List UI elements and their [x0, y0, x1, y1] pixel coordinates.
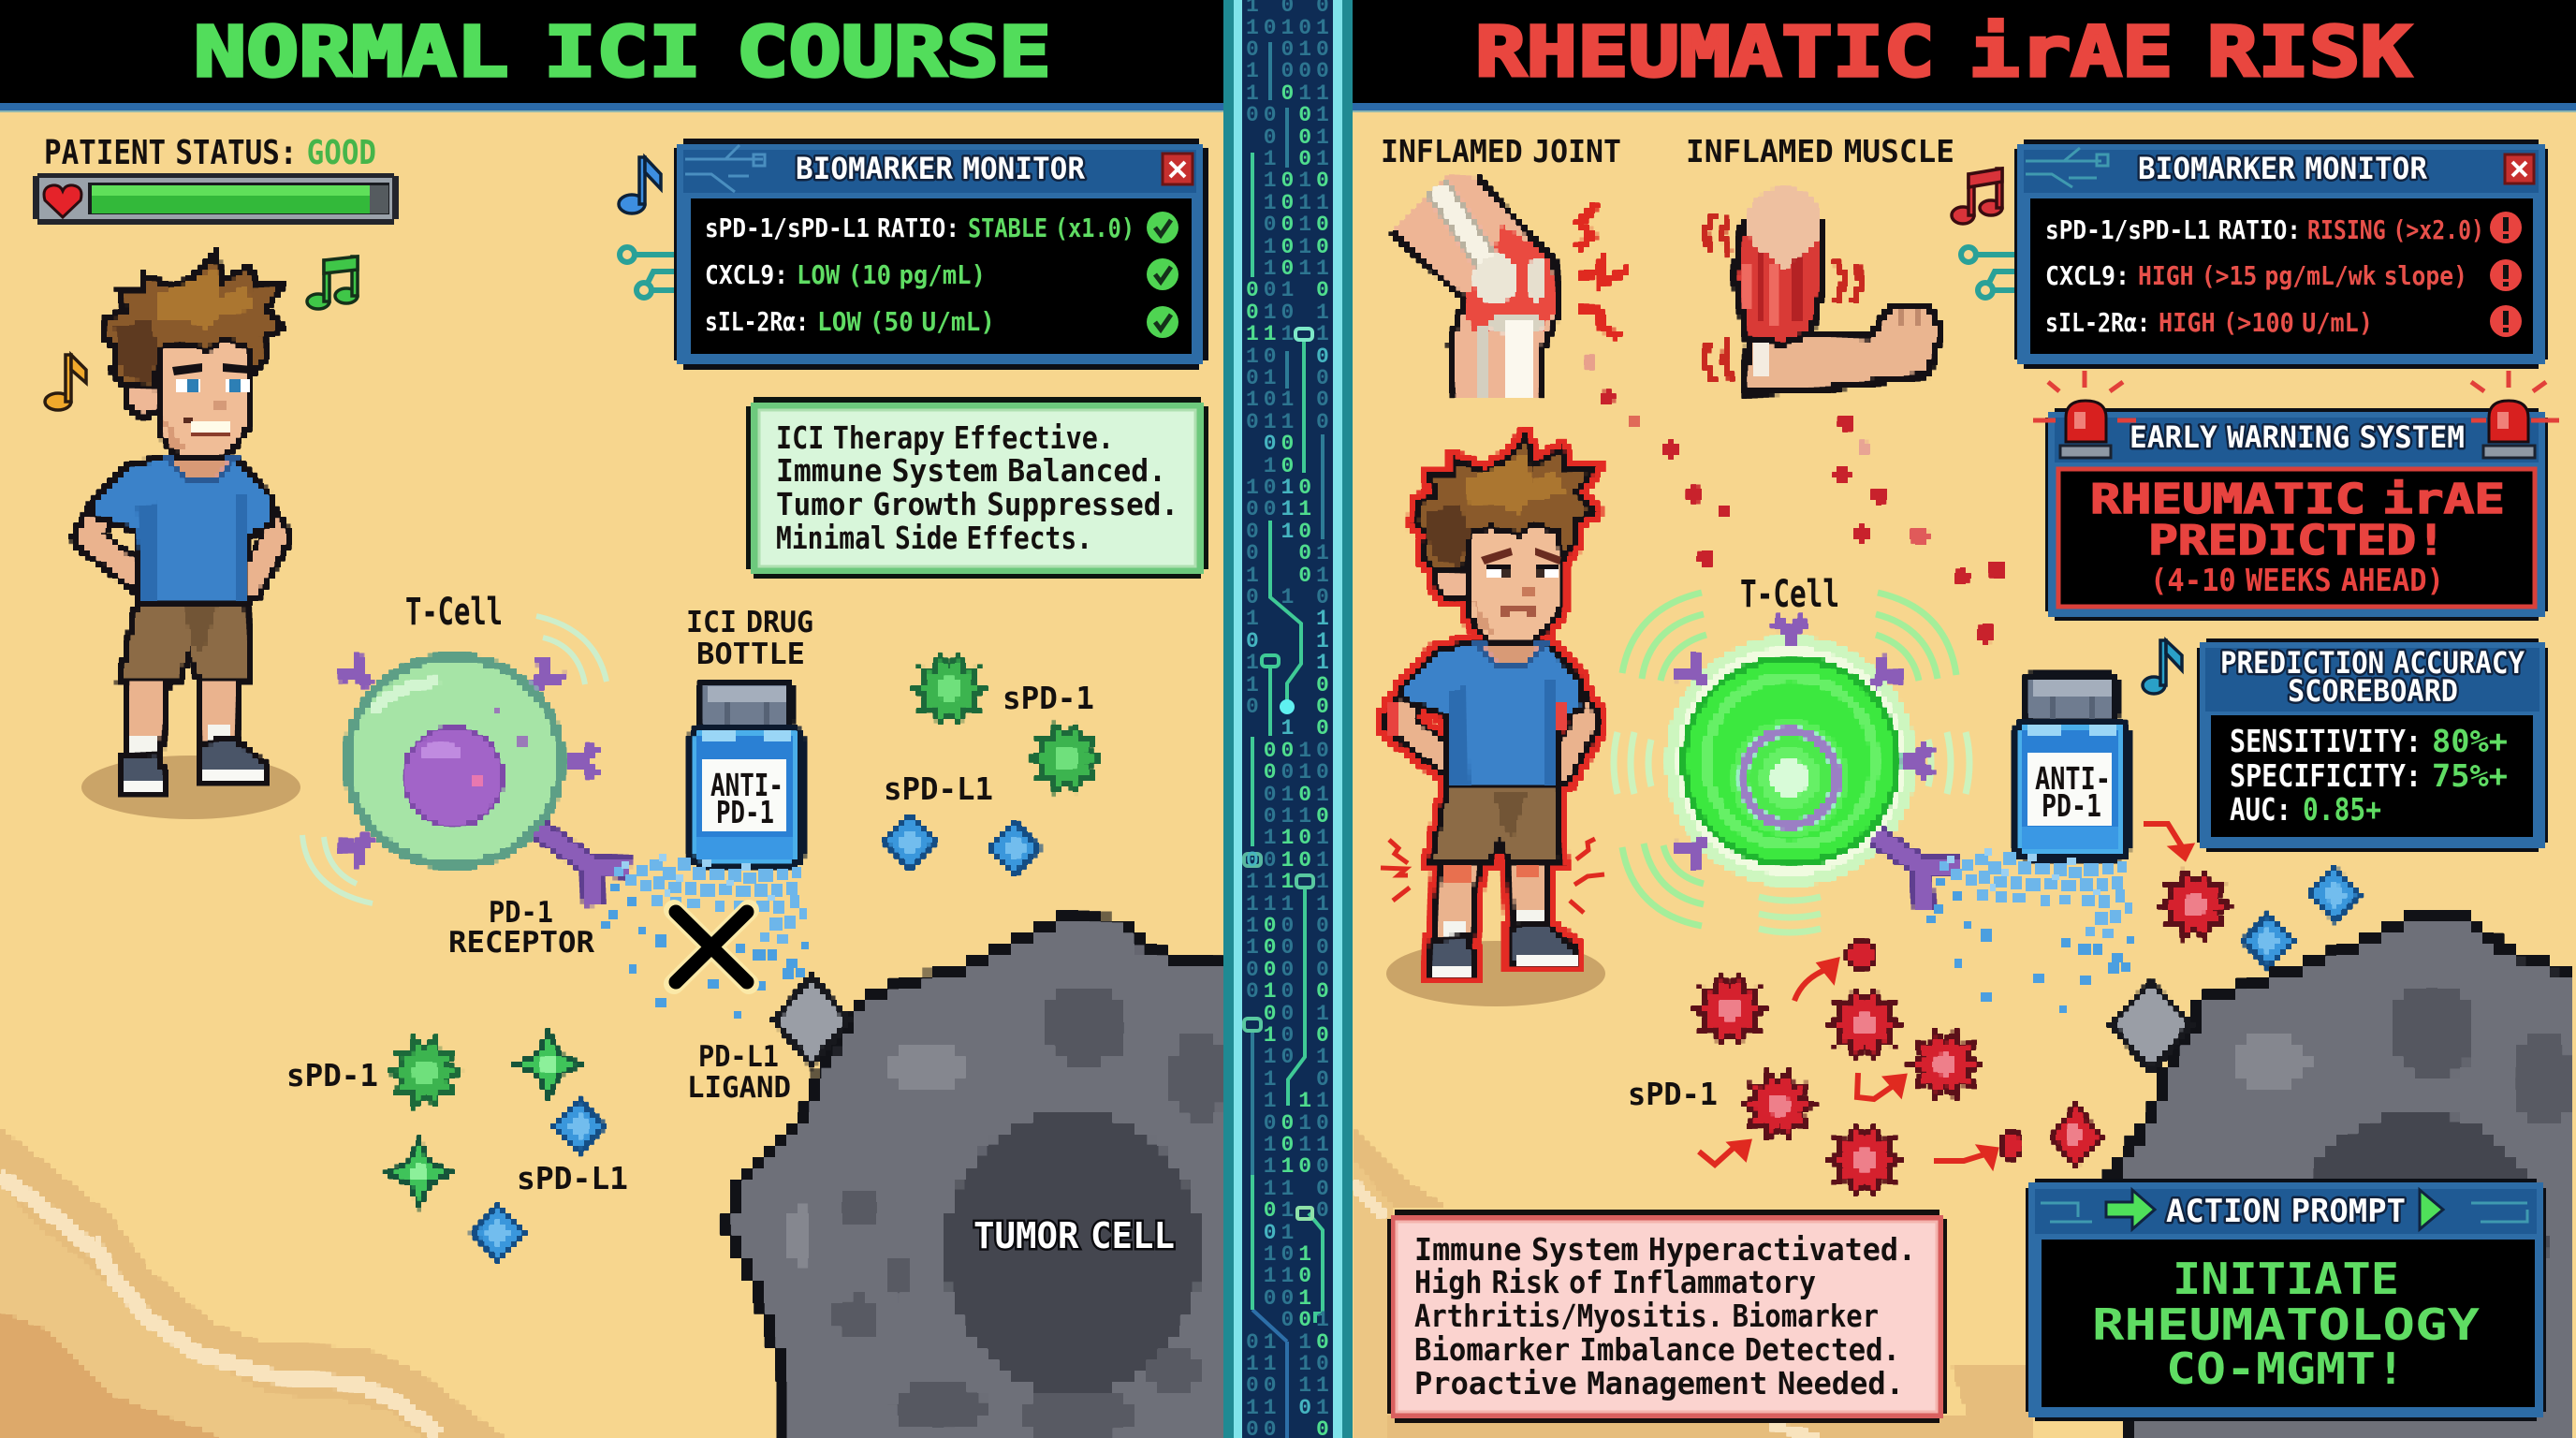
row: CXCL9: HIGH (>15 pg/mL/wk slope) — [2138, 260, 2467, 291]
close button — [2505, 154, 2534, 183]
row: ratio: sPD-1/sPD-L1 RATIO: — [705, 213, 959, 243]
bottle label text — [710, 767, 783, 830]
T-cell right — [1614, 573, 1969, 932]
binary digits: 0110 — [1246, 804, 1334, 829]
receptor label: RECEPTOR — [448, 926, 594, 960]
T-cell label: T-Cell — [405, 591, 503, 634]
warning text — [2090, 476, 2505, 598]
row: sIL-2Ra: sIL-2Rα: — [2045, 307, 2150, 338]
character body — [86, 253, 283, 792]
PD-L1 ligand left — [775, 976, 848, 1064]
header: left — [0, 0, 1226, 112]
binary digits: 10 1 — [1246, 1045, 1334, 1069]
binary digits: 1101 — [1246, 826, 1334, 850]
binary digits — [1246, 0, 1334, 1438]
T-cell left — [302, 591, 607, 903]
warning text: RHEUMATIC irAE — [2090, 476, 2505, 523]
icon: teal music note — [2143, 640, 2182, 694]
marker labels left: sPD-1 — [1003, 680, 1094, 716]
binary digits: 1 011 — [1246, 81, 1334, 106]
monitor title: BIOMARKER MONITOR — [796, 151, 1086, 186]
glowing node — [1280, 699, 1295, 714]
arrow: green triangle — [2420, 1190, 2443, 1229]
binary digits: 1011 — [1246, 257, 1334, 281]
binary digits: 0101 — [1246, 783, 1334, 807]
decorative sand waves right — [1353, 1128, 2031, 1438]
bottle label text — [2035, 760, 2111, 824]
T-cell glowing body — [1665, 614, 1935, 887]
circuit trace left — [620, 247, 674, 298]
pain marks — [1381, 839, 1604, 913]
callout: green status box: ICI Therapy Effective. — [776, 419, 1114, 456]
drug spray particles left — [601, 854, 809, 1019]
callout: green status box — [746, 397, 1208, 579]
scoreboard values: 75%+ — [2432, 757, 2508, 794]
binary digits: 0 1 0 — [1246, 585, 1334, 609]
scoreboard values: 80%+ — [2432, 723, 2508, 759]
icon: heart — [44, 185, 81, 217]
binary digits: 00 11 — [1246, 1373, 1334, 1398]
binary digits: 00 1 — [1246, 1002, 1334, 1026]
row: CXCL9: LOW (10 pg/mL) — [797, 259, 986, 290]
arrows: red motion — [1699, 824, 2190, 1165]
circuit lines — [1244, 42, 1323, 1438]
binary digits: 0 010 — [1246, 37, 1334, 62]
binary digits: 0010 — [1246, 213, 1334, 237]
binary digits: 00101 — [1246, 848, 1334, 873]
warning text: (4-10 WEEKS AHEAD) — [2150, 562, 2444, 598]
monitor: biomarker right — [2014, 139, 2548, 369]
binary digits: 1 11 — [1246, 1089, 1334, 1113]
callout: pink risk box: High Risk of Inflammatory — [1414, 1264, 1816, 1300]
T-cell body — [332, 648, 600, 873]
binary digits: 0010 — [1246, 739, 1334, 763]
arrow: green right — [2106, 1190, 2155, 1229]
scoreboard title: PREDICTION ACCURACY — [2220, 645, 2525, 681]
icon: orange music note — [45, 355, 86, 410]
circuit trace right — [1961, 247, 2014, 298]
binary digits: 0 01 — [1246, 125, 1334, 150]
binary digits: 011 0 — [1246, 410, 1334, 434]
binary digits: 010 1 — [1246, 301, 1334, 325]
row: ratio: RISING (>x2.0) — [2307, 214, 2484, 245]
PD-1 receptor arm left — [539, 829, 631, 906]
panel: early warning system — [2033, 371, 2559, 621]
binary digits: 0010 — [1246, 1111, 1334, 1136]
close button — [1163, 154, 1193, 184]
scoreboard values: SENSITIVITY: — [2230, 723, 2422, 759]
tumor cell left — [728, 919, 1245, 1438]
character: healthy patient — [81, 253, 300, 819]
scoreboard values — [2230, 723, 2508, 828]
bottle label text: ANTI- — [2035, 760, 2111, 797]
ligand label: LIGAND — [687, 1071, 791, 1105]
activation waves — [1614, 593, 1969, 932]
PD-L1 ligand right — [2112, 983, 2190, 1071]
tumor cell right — [2112, 917, 2576, 1438]
action text: INITIATE — [2173, 1254, 2399, 1304]
drug spray particles right — [1926, 848, 2134, 1013]
divider: binary column — [1223, 0, 1353, 1438]
character shadow — [81, 756, 300, 819]
marker labels left: sPD-L1 — [517, 1160, 628, 1196]
binary digits: 0 0 — [1246, 695, 1334, 719]
character shadow — [1386, 941, 1605, 1006]
icon: alarm left — [2033, 371, 2136, 458]
ligand label — [687, 1040, 791, 1105]
bottle label text: ANTI- — [710, 767, 783, 803]
ligand label: PD-L1 — [698, 1040, 779, 1074]
header: right: RHEUMATIC irAE RISK — [1475, 12, 2412, 93]
binary digits: 00 01 — [1246, 103, 1334, 127]
binary digits: 1 0 — [1246, 1067, 1334, 1092]
binary digits: 1010 — [1246, 235, 1334, 259]
character: patient at risk — [1381, 437, 1605, 1006]
icons: alerts — [2490, 212, 2522, 337]
binary digits: 1 0 — [1246, 716, 1334, 741]
binary digits: 0011 — [1246, 497, 1334, 521]
panel title: EARLY WARNING SYSTEM — [2130, 419, 2465, 455]
binary digits: 01 0 — [1246, 366, 1334, 390]
drug label left: BOTTLE — [696, 638, 805, 671]
scoreboard values: AUC: — [2230, 791, 2291, 828]
drug label left: ICI DRUG — [686, 606, 813, 639]
label: inflamed muscle: INFLAMED MUSCLE — [1686, 133, 1954, 169]
receptor label: PD-1 — [489, 896, 553, 930]
callout: green status box: Tumor Growth Suppressed. — [776, 486, 1178, 522]
icon: alarm right — [2471, 371, 2559, 458]
monitor: biomarker left — [674, 139, 1208, 370]
binary digits: 000 0 — [1246, 958, 1334, 982]
binary digits: 001 0 — [1246, 278, 1334, 302]
health bar — [33, 173, 399, 225]
binary digits: 010 0 — [1246, 979, 1334, 1004]
binary digits: 1 1 — [1246, 607, 1334, 631]
binary digits: 01 — [1246, 1221, 1334, 1245]
action text: RHEUMATOLOGY — [2092, 1299, 2480, 1350]
binary digits: 10 0 — [1246, 345, 1334, 369]
label: inflamed joint: INFLAMED JOINT — [1381, 133, 1621, 169]
binary digits: 1100 — [1246, 1154, 1334, 1179]
row: sIL-2Ra — [2045, 307, 2373, 338]
decorative sand waves left — [0, 1128, 505, 1438]
binary digits: 0010 — [1246, 760, 1334, 785]
tumor label left: TUMOR CELL — [973, 1215, 1175, 1256]
marker labels left: sPD-L1 — [884, 770, 993, 807]
warning text: PREDICTED! — [2148, 517, 2446, 565]
binary digits: 1011 — [1246, 1133, 1334, 1157]
binary digits: 101 — [1246, 1242, 1334, 1267]
cytokine dots — [1584, 356, 2007, 643]
panel: action prompt — [2026, 1179, 2546, 1421]
binary digits: 0 10 — [1246, 520, 1334, 544]
binary digits: 1 01 — [1246, 147, 1334, 171]
icon: inflamed muscle arm — [1704, 187, 1941, 393]
header: right — [1348, 0, 2576, 112]
binary digits: 11 10 — [1246, 1352, 1334, 1376]
icon: red music note — [1952, 169, 2002, 224]
binary digits: 0 1 — [1246, 629, 1334, 653]
binary digits: 101 0 — [1246, 388, 1334, 412]
callout: pink risk box: Arthritis/Myositis. Biomarker — [1414, 1298, 1879, 1334]
binary digits: 100 0 — [1246, 935, 1334, 960]
row: ratio: sPD-1/sPD-L1 RATIO: — [2045, 214, 2301, 245]
binary digits: 111 1 — [1246, 870, 1334, 894]
soluble markers left — [388, 656, 1101, 1259]
header: left: NORMAL ICI COURSE — [194, 12, 1051, 93]
row: CXCL9: CXCL9: — [705, 259, 788, 290]
character face: unwell — [1481, 548, 1561, 617]
drug bottle left — [691, 682, 802, 865]
binary digits: 1010 — [1246, 169, 1334, 193]
scoreboard values: 0.85+ — [2303, 791, 2381, 828]
marker labels left: sPD-1 — [286, 1057, 378, 1093]
action text: CO-MGMT! — [2166, 1343, 2406, 1394]
row: sIL-2Ra: sIL-2Rα: — [705, 306, 809, 337]
binary digits: 01 0 — [1246, 1198, 1334, 1223]
row: ratio: STABLE (x1.0) — [968, 213, 1134, 243]
binary digits: 11 01 — [1246, 1396, 1334, 1420]
label: sPD-1 right: sPD-1 — [1628, 1076, 1718, 1112]
drug bottle right — [2016, 675, 2128, 858]
scoreboard title — [2220, 645, 2525, 709]
binary digits: 10 0 — [1246, 1023, 1334, 1048]
callout: green status box: Immune System Balanced. — [776, 452, 1166, 489]
binary digits: 001 — [1246, 1308, 1334, 1332]
binary digits: 110 — [1246, 1264, 1334, 1288]
binary digits: 01 10 — [1246, 1330, 1334, 1355]
binary digits: 111 1 — [1246, 322, 1334, 346]
binary digits: 001 — [1246, 1286, 1334, 1311]
binary digits: 100 0 — [1246, 914, 1334, 938]
scoreboard title: SCOREBOARD — [2288, 673, 2458, 709]
character face: smiling — [172, 363, 251, 436]
binary digits: 11 0 — [1246, 1177, 1334, 1201]
row: ratio — [705, 213, 1134, 243]
panel title: ACTION PROMPT — [2166, 1193, 2406, 1230]
callout: pink risk box: Biomarker Imbalance Detected. — [1414, 1331, 1900, 1368]
icon: blocking X — [674, 910, 749, 984]
row: CXCL9 — [705, 259, 986, 290]
binary digits: 10 — [1246, 454, 1334, 478]
binary digits: 00 — [1246, 432, 1334, 456]
row: sIL-2Ra: HIGH (>100 U/mL) — [2159, 307, 2373, 338]
icon: green music note — [307, 257, 358, 309]
scoreboard values: SPECIFICITY: — [2230, 757, 2422, 794]
bottle label text: PD-1 — [716, 794, 774, 830]
marker labels left — [286, 680, 1094, 1196]
binary digits: 111 1 — [1246, 892, 1334, 917]
binary digits: 0 01 — [1246, 541, 1334, 565]
action text — [2092, 1254, 2480, 1394]
binary digits: 1 01 — [1246, 564, 1334, 588]
binary digits: 10101 — [1246, 16, 1334, 40]
callout: pink risk box — [1387, 1210, 1947, 1423]
T-cell motion arcs — [302, 616, 607, 903]
binary digits: 1 0 — [1246, 673, 1334, 697]
binary digits: 1 000 — [1246, 59, 1334, 83]
icon: inflamed knee — [1392, 176, 1629, 396]
binary digits: 1010 — [1246, 476, 1334, 500]
row: ratio — [2045, 214, 2484, 245]
character body with red outline — [1387, 437, 1593, 976]
patient status: PATIENT STATUS: GOOD — [44, 134, 376, 172]
PD-1 receptor arm right — [1876, 836, 1962, 910]
T-cell label: T-Cell — [1740, 573, 1839, 616]
drug label left — [686, 606, 813, 671]
bottle label text: PD-1 — [2042, 787, 2101, 824]
soluble markers right — [1695, 868, 2360, 1193]
panel: prediction scoreboard — [2197, 638, 2548, 852]
callout: pink risk box: Proactive Management Needed. — [1414, 1365, 1904, 1401]
callout: pink risk box: Immune System Hyperactivated. — [1414, 1231, 1916, 1268]
monitor title: BIOMARKER MONITOR — [2138, 151, 2428, 186]
binary digits: 1011 — [1246, 191, 1334, 215]
row: sIL-2Ra: LOW (50 U/mL) — [817, 306, 995, 337]
receptor label — [448, 896, 594, 960]
callout: green status box: Minimal Side Effects. — [776, 520, 1092, 556]
row: CXCL9: CXCL9: — [2045, 260, 2130, 291]
icons: status checks — [1147, 212, 1178, 338]
binary digits: 1 1 — [1246, 651, 1334, 675]
icon: blue music note — [619, 157, 661, 213]
row: sIL-2Ra — [705, 306, 995, 337]
